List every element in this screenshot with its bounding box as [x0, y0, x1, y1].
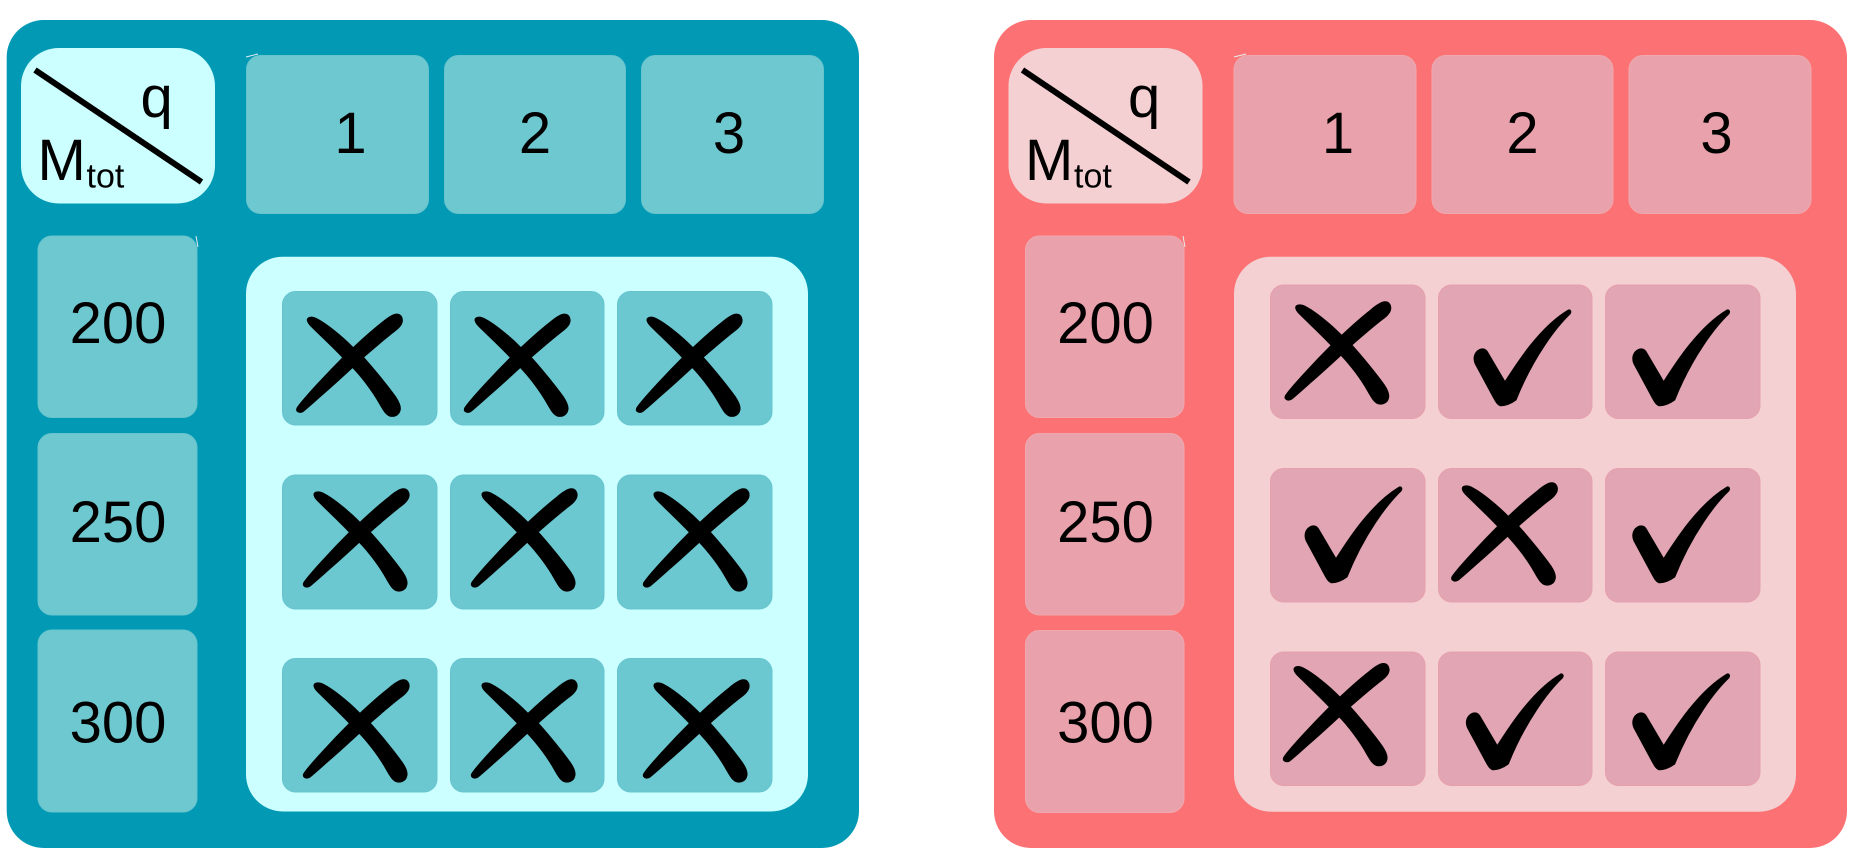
- result: M250 q2 cross: [450, 475, 604, 609]
- inner panel: blue results: [246, 257, 808, 812]
- corner cell: Mtot over q: tot: [86, 158, 125, 196]
- corner cell: Mtot over q: q: [1128, 65, 1160, 130]
- column header: q = 3: [642, 56, 824, 214]
- column header: q = 3: [1629, 56, 1811, 214]
- row header: Mtot = 300: [38, 630, 197, 812]
- row header: Mtot = 250: 250: [70, 490, 166, 555]
- result: M300 q3 cross: [618, 658, 772, 792]
- result: M200 q1 cross: [282, 292, 437, 425]
- corner cell: Mtot over q: q: [140, 65, 173, 130]
- column header: q = 1: [246, 54, 428, 214]
- panel: red grid: [994, 20, 1847, 848]
- result: M200 q2 cross: [450, 292, 604, 425]
- corner cell: Mtot over q: M: [1025, 128, 1073, 193]
- row header: Mtot = 200: [38, 236, 198, 418]
- result: M250 q3 check: [1606, 468, 1760, 602]
- row header: Mtot = 300: 300: [70, 690, 166, 756]
- result: M200 q3 check: [1606, 285, 1760, 418]
- row header: Mtot = 300: 300: [1057, 690, 1154, 756]
- result: M300 q1 cross: [1270, 652, 1425, 786]
- column header: q = 1: 1: [334, 101, 367, 166]
- row header: Mtot = 250: [38, 434, 197, 615]
- row header: Mtot = 200: 200: [1057, 291, 1154, 356]
- row header: Mtot = 250: 250: [1057, 490, 1154, 555]
- column header: q = 1: 1: [1322, 101, 1354, 166]
- panel: blue grid: [7, 20, 859, 848]
- result: M300 q3 check: [1606, 652, 1760, 786]
- column header: q = 2: 2: [519, 101, 551, 166]
- result: M250 q1 check: [1270, 468, 1425, 602]
- corner cell: Mtot over q: [21, 48, 215, 204]
- result: M300 q2 check: [1438, 652, 1592, 786]
- corner cell: Mtot over q: [1008, 48, 1202, 204]
- column header: q = 2: [1432, 56, 1613, 214]
- row header: Mtot = 250: [1026, 434, 1184, 615]
- result: M200 q3 cross: [618, 292, 772, 425]
- inner panel: red results: [1234, 257, 1796, 812]
- column header: q = 2: [444, 56, 626, 214]
- row header: Mtot = 300: [1026, 630, 1184, 812]
- row header: Mtot = 200: 200: [70, 291, 166, 356]
- row header: Mtot = 200: [1026, 236, 1185, 418]
- corner cell: Mtot over q: M: [38, 128, 86, 193]
- result: M300 q1 cross: [282, 658, 437, 792]
- column header: q = 3: 3: [1700, 101, 1733, 166]
- corner cell: Mtot over q: tot: [1074, 158, 1112, 196]
- result: M250 q2 cross: [1438, 468, 1592, 602]
- column header: q = 2: 2: [1506, 101, 1539, 166]
- result: M250 q3 cross: [618, 475, 772, 609]
- result: M200 q1 cross: [1270, 285, 1425, 418]
- result: M250 q1 cross: [282, 475, 437, 609]
- result: M300 q2 cross: [450, 658, 604, 792]
- column header: q = 3: 3: [713, 101, 745, 166]
- result: M200 q2 check: [1438, 285, 1592, 418]
- column header: q = 1: [1234, 54, 1416, 214]
